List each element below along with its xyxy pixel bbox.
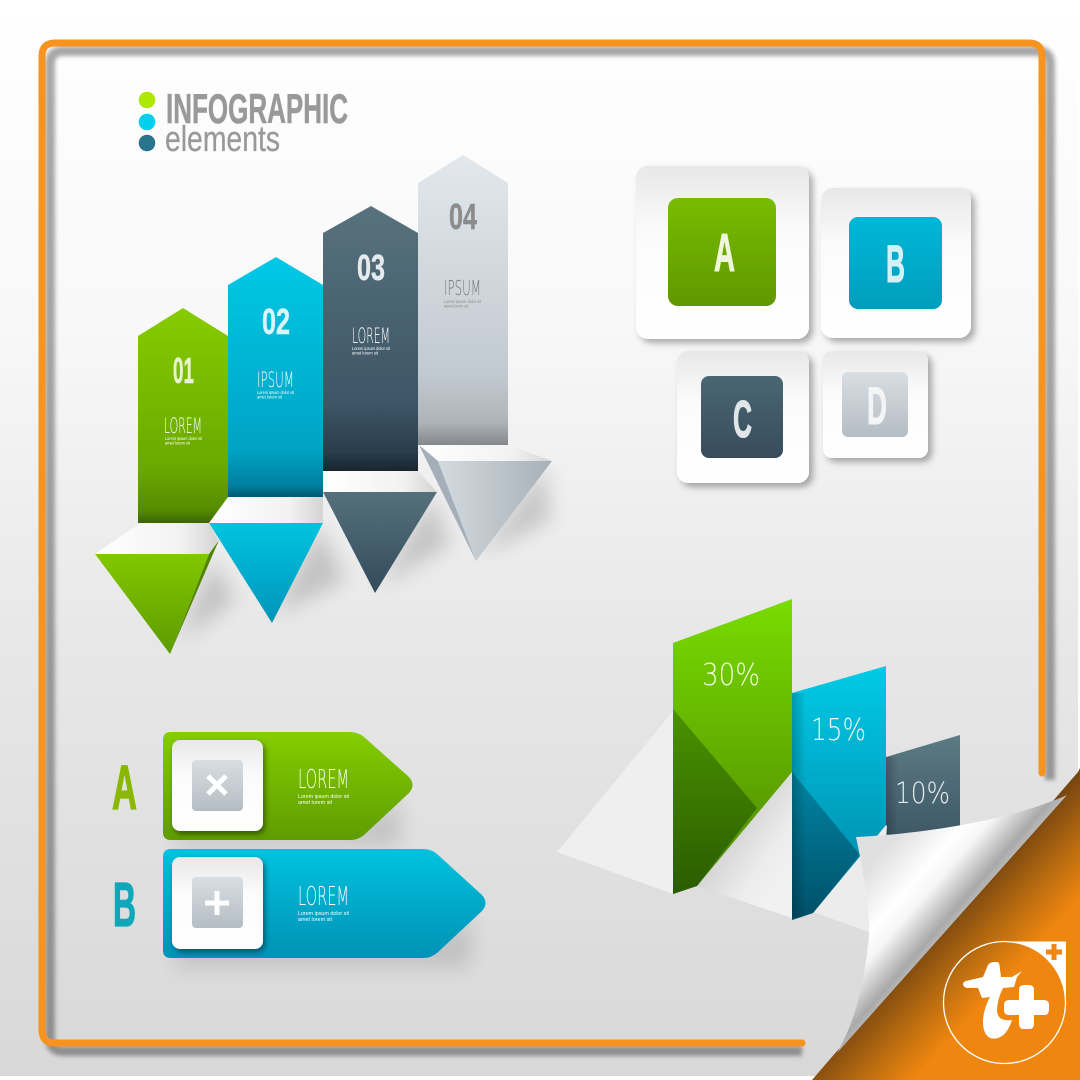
- arrow 01: 01: [173, 350, 194, 391]
- arrow 02: 02: [262, 301, 290, 342]
- arrow 01: amet lorem sit: [165, 440, 191, 446]
- band 10%: 10%: [895, 776, 950, 810]
- subtitle: elements: elements: [165, 118, 280, 159]
- pyramid shadows: [180, 465, 550, 640]
- blue arrow button: Lorem ipsum dolor sit: [298, 911, 349, 917]
- band 10%: [886, 735, 960, 840]
- title block: [139, 85, 348, 159]
- arrow 04: Lorem ipsum dolor sit: [444, 299, 482, 304]
- icon: small plus: [1046, 944, 1062, 960]
- arrow 03: [323, 206, 418, 471]
- band 30%: 30%: [702, 658, 760, 693]
- arrow 01: Lorem ipsum dolor sit: [165, 436, 203, 441]
- chart: folded percentage bands: [557, 599, 960, 936]
- label letter A: A: [112, 753, 137, 823]
- pyramid 02: [209, 497, 323, 623]
- arrow shadows: [175, 800, 470, 966]
- panel: lettered square tiles: [636, 166, 971, 483]
- tile C: C: [733, 391, 752, 449]
- panel: A and B arrow labels: [112, 732, 486, 966]
- badge corner and ring: [1004, 941, 1066, 1002]
- arrow 03: Lorem ipsum dolor sit: [352, 346, 391, 351]
- arrow 04: amet lorem sit: [444, 304, 469, 308]
- white fold left: [557, 711, 673, 894]
- blue arrow button: amet lorem sit: [298, 917, 332, 923]
- label letter B: B: [113, 871, 136, 940]
- arrow 04: [418, 155, 508, 445]
- tile B: B: [886, 235, 905, 294]
- arrow 02: [228, 257, 323, 497]
- pyramid 04: [419, 445, 552, 561]
- green arrow button: [163, 732, 412, 840]
- blue arrow button: [163, 849, 486, 958]
- icon: t letter: [963, 962, 1022, 1039]
- band 15%: 15%: [811, 713, 866, 748]
- arrow 01: LOREM: [164, 414, 202, 438]
- arrow 01: [138, 308, 228, 523]
- blue arrow button: LOREM: [298, 882, 349, 912]
- arrow 02: IPSUM: [257, 368, 294, 392]
- arrow 03: LOREM: [352, 324, 390, 348]
- tile A: A: [714, 223, 735, 283]
- icon: cross: [208, 776, 226, 794]
- curled page: [837, 795, 1067, 1053]
- tile C: [677, 351, 809, 483]
- title dots: [139, 92, 155, 151]
- arrow 04: 04: [449, 196, 477, 237]
- tile B: [821, 188, 971, 338]
- page curl corner: [812, 768, 1080, 1080]
- logo badge: [944, 941, 1066, 1064]
- pyramid 01: [95, 523, 219, 654]
- white fold middle: [697, 772, 792, 918]
- white fold right: [813, 825, 887, 936]
- pyramid 03: [323, 471, 437, 593]
- arrow 03: 03: [357, 247, 385, 288]
- tile D: [823, 351, 928, 458]
- green arrow button: LOREM: [298, 765, 349, 795]
- orange corner: [812, 768, 1080, 1080]
- band 15%: [792, 666, 886, 920]
- green arrow button: Lorem ipsum dolor sit: [298, 794, 349, 800]
- tile D: D: [867, 377, 887, 436]
- band 30%: [673, 599, 792, 894]
- icon: plus: [205, 891, 229, 915]
- arrow 02: amet lorem sit: [257, 394, 283, 400]
- arrow 03: amet lorem sit: [352, 350, 379, 356]
- icon: large plus: [1004, 985, 1049, 1029]
- tile A: [636, 166, 809, 339]
- arrow 04: IPSUM: [444, 276, 481, 300]
- green arrow button: amet lorem sit: [298, 800, 332, 806]
- arrow 02: Lorem ipsum dolor sit: [257, 390, 295, 395]
- title: INFOGRAPHIC: INFOGRAPHIC: [166, 85, 348, 132]
- chart: four stepped arrows with pyramids: [95, 155, 552, 654]
